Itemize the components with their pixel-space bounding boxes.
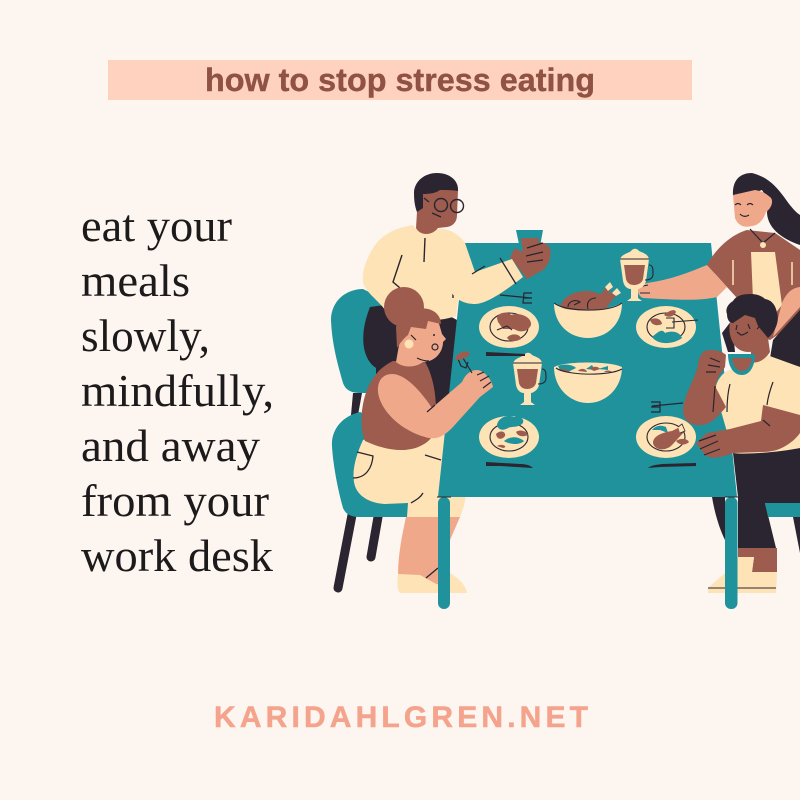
plate: bottom left (479, 416, 539, 458)
website footer: KARIDAHLGREN.NET (214, 701, 588, 734)
main message text: and away (81, 420, 260, 471)
main message text: eat your (81, 200, 232, 251)
plate: top left chicken (479, 306, 539, 348)
bowl with roast turkey (554, 282, 622, 338)
main message text: meals (81, 255, 190, 306)
cutlery: forks and knives (486, 293, 696, 468)
woman with hair bun body (353, 287, 467, 593)
chair: front left (332, 412, 420, 588)
boy body (683, 294, 800, 593)
woman with long hair body (638, 173, 800, 367)
drink mug: top (620, 249, 653, 301)
man's arm, hand and glass (445, 230, 551, 304)
chair: back left (331, 289, 385, 393)
illustration: family eating at a table (331, 173, 800, 609)
drink mug: bottom (513, 353, 546, 405)
main message text: slowly, (81, 310, 210, 361)
woman's arm holding fork (378, 351, 493, 438)
title banner (108, 60, 692, 100)
plate: top right (636, 306, 698, 348)
dining table (437, 243, 737, 609)
bowl with salad (554, 362, 622, 403)
main message text (81, 200, 274, 581)
main message text: work desk (81, 530, 273, 581)
title banner: how to stop stress eating (205, 62, 595, 98)
main message text: mindfully, (81, 365, 274, 416)
plate: bottom right chicken (636, 416, 696, 458)
main message text: from your (81, 475, 269, 526)
man with glasses body (351, 173, 470, 430)
table leg: right (725, 497, 738, 609)
